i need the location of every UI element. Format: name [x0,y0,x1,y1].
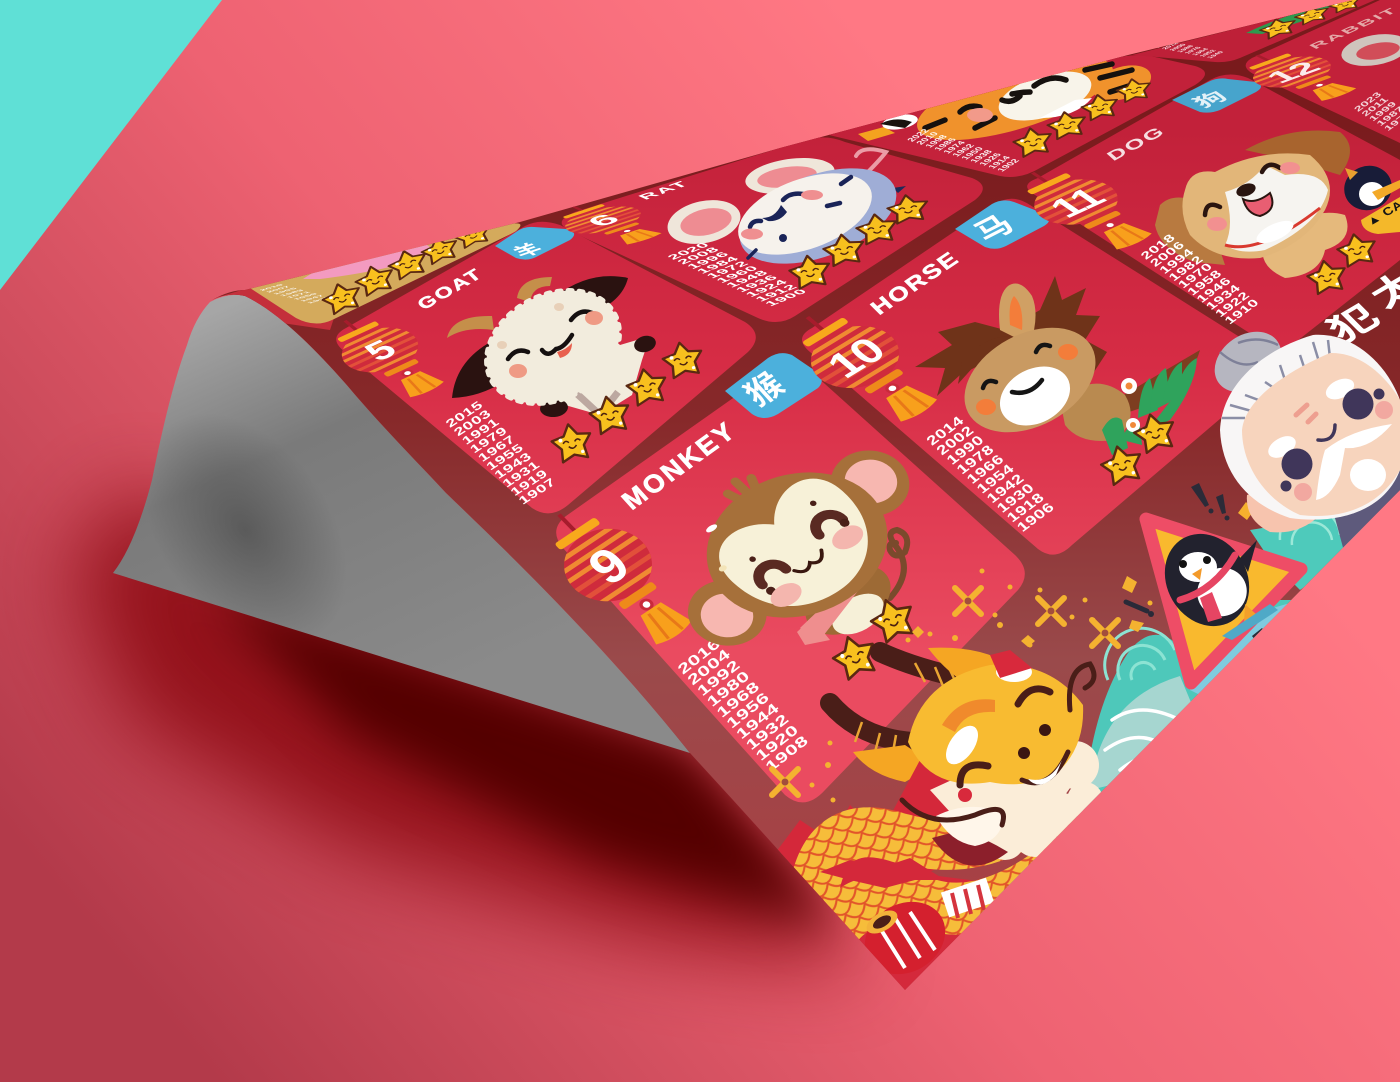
blue strip at lower edge [942,898,1008,960]
horse lantern 10: 10 [817,330,895,386]
monkey years: 1968 [713,678,763,721]
rabbit label: RABBIT [1306,6,1400,51]
hand [1247,490,1320,532]
goat years: 1907 [516,476,559,507]
horse years: 2002 [934,424,977,458]
horse years: 1942 [984,472,1028,506]
rat years: 1900 [762,288,811,308]
monkey label: MONKEY [616,416,742,515]
heading on brown panel [1320,264,1400,349]
pig years: 2007 [265,285,292,293]
panel: pig card [250,223,520,324]
lower red paper corner [781,853,974,990]
goat label: GOAT [413,265,487,313]
dog years: 1982 [1165,253,1206,283]
rabbit lantern 12: 12 [1259,58,1328,87]
crest card years: 1976 [1183,46,1204,54]
exclamation marks [1191,483,1230,520]
pig years: 1995 [271,287,299,295]
monkey years: 2016 [674,635,724,677]
whiskers [1069,664,1094,710]
monkey years: 1956 [723,689,773,731]
rat years: 2008 [675,246,723,266]
character: old man robe behind the sign [1250,507,1365,590]
teal wave backdrop [905,500,1400,1000]
tiger years: 1902 [995,158,1022,173]
crest card years: 1988 [1176,45,1196,53]
monkey character [688,450,910,646]
rat years: 1912 [753,283,801,303]
pig years: 1959 [292,292,320,300]
crest card years: 2024 [1153,40,1173,48]
rabbit years: 2011 [1360,96,1391,118]
rat years: 1984 [694,255,742,275]
dog lantern 11: 11 [1041,182,1115,223]
dog years: 2006 [1147,239,1187,269]
tiger years: 1998 [923,134,950,149]
ears [928,648,1010,695]
cast shadow of the folded paper [70,490,870,970]
panel: monkey card [556,365,1025,802]
rabbit ear [1339,29,1400,71]
panel: dragon card at the crest [1132,0,1375,62]
heading on brown panel: 犯 [1320,298,1387,349]
small caution penguin [1338,159,1400,234]
crest card years: 2012 [1161,42,1181,50]
tiger years: 2010 [914,131,941,146]
dog years: 1934 [1203,282,1243,312]
pig years: 2019 [258,284,285,291]
moustache [1316,424,1392,500]
horse tab [955,200,1049,249]
rat lantern 6 [563,204,662,244]
pig years: 1971 [285,291,313,299]
rat years: 1936 [733,274,781,294]
monkey years: 1908 [762,732,812,775]
goat years: 1955 [484,442,527,473]
goat tab: 羊 [507,240,548,260]
left edge red highlight strip [216,288,334,330]
tiger years: 1986 [932,137,959,152]
dog years: 1994 [1156,246,1197,276]
goat years: 1967 [476,434,518,464]
horse years: 1954 [974,462,1018,496]
goat stars [549,339,705,464]
dark robe [1335,455,1400,555]
dog tab [1172,78,1261,113]
striped tail [945,890,990,905]
panel: rabbit card [1246,0,1400,143]
tiger years: 1938 [968,149,995,164]
tiger years: 2022 [905,128,932,143]
rat lantern 6: 6 [580,211,627,230]
crest card years: 1964 [1191,48,1211,56]
sparkles and confetti [772,568,1154,802]
goat lantern 5 [338,320,444,398]
teal corner sheet [0,0,222,290]
monkey lantern 9: 9 [577,538,642,595]
horse tab: 马 [967,210,1021,247]
penguin [1148,518,1278,642]
horse years: 1966 [964,452,1008,487]
rat years: 1948 [723,269,772,289]
monkey years: 1980 [703,667,753,710]
hair [1220,335,1400,520]
character: old man [1203,319,1400,555]
horse years: 1990 [944,433,987,468]
panel: dog card [1027,74,1400,350]
horse years: 1978 [954,443,998,477]
tiger years: 1962 [950,143,977,158]
crest card years: 2000 [1168,43,1189,51]
dog character [1155,130,1350,278]
green dragon and stars at the crest [1246,0,1362,40]
monkey years: 1944 [732,699,783,742]
goat years: 1979 [468,425,510,456]
monkey tab [725,353,822,418]
pig years: 1947 [299,294,326,302]
rabbit lantern 12 [1221,42,1377,109]
rat character [668,147,906,264]
scaled body coils [815,830,1010,885]
dog years: 1910 [1221,296,1262,326]
tiger years: 1974 [941,140,968,155]
pig stars [321,230,488,316]
horse label: HORSE [865,247,964,319]
dog years: 1946 [1193,275,1234,305]
head [908,664,1083,784]
panel: goat card [336,222,756,513]
horse years: 1918 [1004,491,1048,525]
rabbit years: 2023 [1352,91,1384,113]
cream wing [936,807,1003,846]
tiger years: 1950 [959,146,986,161]
pig years: 1935 [305,296,333,304]
rat years: 1996 [684,251,733,271]
antlers [880,652,962,678]
dog years: 1970 [1175,260,1215,290]
goat years: 2003 [452,408,494,439]
rat stars [787,192,930,290]
monkey years: 1932 [742,710,792,753]
paper underside: grey curl [113,295,690,753]
monkey tab: 猴 [738,367,792,413]
character: dragon [770,648,1103,935]
goat years: 1931 [500,459,543,490]
rat years: 1972 [704,260,752,280]
horse years: 1930 [994,481,1038,516]
dog lantern 11 [1028,172,1152,250]
rat years: 1924 [743,278,791,298]
red fins [770,760,960,900]
pig years: 1983 [278,289,306,297]
tiger stars [1012,76,1153,158]
dog years: 1958 [1184,268,1225,298]
pig body [303,243,431,279]
tiger years: 1926 [977,152,1004,167]
dog stars [1305,230,1379,295]
tiger years: 1914 [986,155,1013,170]
crest card years: 1940 [1206,51,1226,59]
crest card years: 1952 [1198,49,1219,57]
horse stars [1100,413,1174,486]
rabbit years: 1999 [1367,101,1399,123]
dog years: 2018 [1137,232,1178,262]
goat tab [495,227,574,260]
goat years: 1991 [460,416,502,447]
horse years: 1906 [1014,500,1058,535]
goat lantern 5: 5 [356,334,404,366]
horse years: 2014 [924,414,967,448]
goat years: 1943 [492,451,535,482]
callout: penguin caution sign [1146,518,1301,683]
tiger lantern tassel [858,127,895,141]
goat years: 1919 [508,468,551,499]
monkey lantern 9 [556,514,690,644]
goat years: 2015 [443,399,486,430]
rat years: 1960 [714,265,762,285]
dark red petal [932,830,1008,866]
monkey stars [832,598,914,681]
zodiac poster: printed top surface [200,0,1400,1000]
horse lantern 10 [803,316,937,422]
dog label: DOG [1104,124,1170,164]
panel: tiger card [825,55,1205,177]
rat label: RAT [635,179,693,201]
panel: rat card [562,137,983,322]
hair bun [1203,319,1293,405]
chip icon [1238,502,1254,520]
panel: horse card [802,199,1275,555]
face [1242,353,1400,516]
horse character [915,276,1200,455]
goat character [447,276,656,417]
rat years: 2020 [665,241,713,261]
monkey years: 1992 [693,656,743,699]
dog years: 1922 [1212,289,1252,319]
monkey years: 2004 [684,645,734,688]
drum lantern [852,888,958,988]
monkey years: 1920 [752,721,802,764]
mane: cream scallops [930,730,1103,860]
tiger character [880,39,1155,157]
dog tab: 狗 [1189,89,1233,111]
